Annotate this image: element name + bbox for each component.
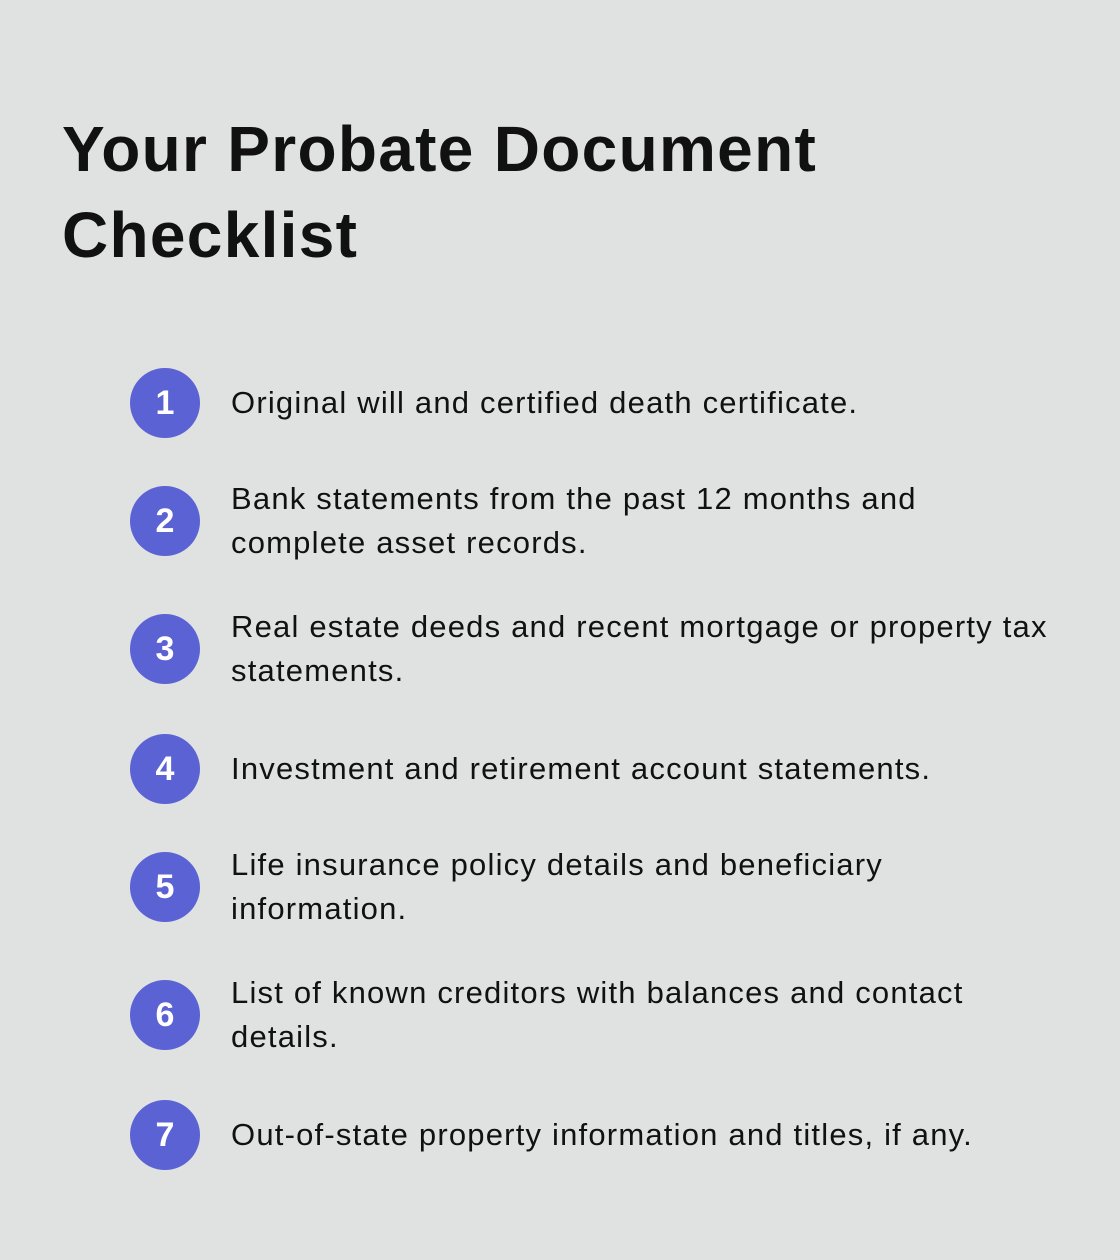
title: Checklist [62, 199, 358, 271]
text 6: List of known creditors with balances and contact [231, 975, 964, 1010]
number badge 2 [130, 486, 200, 556]
number badge 7: 7 [156, 1116, 174, 1154]
number badge 1: 1 [156, 384, 174, 422]
item 3 [130, 609, 1048, 688]
title: Your Probate Document [62, 113, 817, 185]
item 4 [130, 734, 931, 804]
number badge 2: 2 [156, 502, 174, 540]
text 4: Investment and retirement account statements. [231, 751, 931, 786]
text 3: Real estate deeds and recent mortgage or property tax [231, 609, 1048, 644]
number badge 4 [130, 734, 200, 804]
number badge 6: 6 [156, 996, 174, 1034]
number badge 3: 3 [156, 630, 174, 668]
text 3 [231, 609, 1048, 688]
text 7: Out-of-state property information and titles, if any. [231, 1117, 973, 1152]
number badge 1 [130, 368, 200, 438]
title [62, 113, 817, 271]
number badge 5 [130, 852, 200, 922]
number badge 3 [130, 614, 200, 684]
text 2: Bank statements from the past 12 months and [231, 481, 917, 516]
text 6: details. [231, 1019, 339, 1054]
text 2: complete asset records. [231, 525, 588, 560]
text 3: statements. [231, 653, 404, 688]
number badge 7 [130, 1100, 200, 1170]
number badge 4: 4 [156, 750, 174, 788]
number badge 6 [130, 980, 200, 1050]
text 6 [231, 975, 964, 1054]
text 5: information. [231, 891, 407, 926]
text 5 [231, 847, 883, 926]
text 1: Original will and certified death certificate. [231, 385, 858, 420]
item 1 [130, 368, 858, 438]
text 2 [231, 481, 917, 560]
number badge 5: 5 [156, 868, 174, 906]
item 5 [130, 847, 883, 926]
text 5: Life insurance policy details and beneficiary [231, 847, 883, 882]
item 2 [130, 481, 917, 560]
item 6 [130, 975, 964, 1054]
item 7 [130, 1100, 973, 1170]
